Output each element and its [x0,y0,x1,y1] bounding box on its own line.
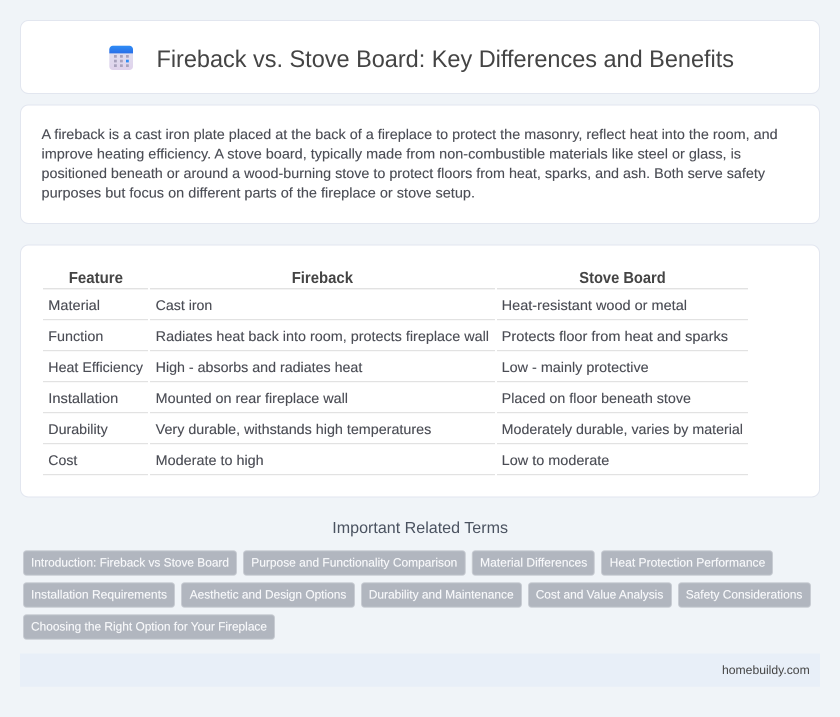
table row: cost [43,452,748,475]
table row: heat efficiency: High - absorbs and radiates heat [156,359,362,375]
tag: safety: Safety Considerations [686,588,802,602]
table row: material: Material [48,297,100,313]
icon: calendar [109,46,133,70]
tag: aesthetic [182,583,354,607]
tag: material [472,551,594,575]
table row: durability: Very durable, withstands high temperatures [156,421,431,437]
table row: installation: Mounted on rear fireplace wall [156,390,348,406]
tag: material: Material Differences [480,556,587,570]
tag: purpose [244,551,465,575]
table row: cost: Moderate to high [156,452,264,468]
text block: definition paragraph: A fireback is a cast iron plate placed at the back of a fireplace to protect the masonry, reflect heat into the room, and [42,126,778,142]
table row: heat efficiency [43,359,748,382]
text block: definition paragraph: purposes but focus on different parts of the fireplace or stove setup. [42,184,475,200]
tag: installation: Installation Requirements [31,588,167,602]
table row: function: Radiates heat back into room, protects fireplace wall [156,328,489,344]
table row: cost: Low to moderate [502,452,610,468]
table header row: Stove Board [579,270,666,287]
tag: safety [678,583,810,607]
table header row: Feature [69,270,123,287]
heading: related terms: Important Related Terms [332,520,508,537]
tag: durability: Durability and Maintenance [369,588,514,602]
tag: choosing [24,615,274,639]
table header row [43,270,748,289]
panel: header [20,20,820,94]
table row: function: Protects floor from heat and sparks [502,328,728,344]
table row: durability: Moderately durable, varies by material [502,421,743,437]
table row: installation [43,390,748,413]
table header row: Fireback [292,270,353,287]
footer [20,654,820,687]
panel: introduction [20,105,820,224]
footer source text: homebuildy.com [722,663,810,677]
tag: introduction [24,551,236,575]
tag: cost: Cost and Value Analysis [536,588,663,602]
tag: aesthetic: Aesthetic and Design Options [190,588,346,602]
text block: definition paragraph: positioned beneath or around a wood-burning stove to protect floors from heat, sparks, and ash. Both serve safety [42,165,765,181]
table row: material: Heat-resistant wood or metal [502,297,687,313]
tag: choosing: Choosing the Right Option for Your Fireplace [31,620,267,634]
text block: definition paragraph: improve heating efficiency. A stove board, typically made from non-combustible materials like steel or glass, is [42,146,741,162]
tag: durability [362,583,522,607]
table row: function [43,328,748,351]
table row: installation: Installation [48,390,118,406]
tag: heat protection: Heat Protection Performance [610,556,766,570]
tag: installation [24,583,174,607]
panel: comparison table [20,245,820,497]
table row: durability: Durability [48,421,108,437]
table row: function: Function [48,328,103,344]
tag: purpose: Purpose and Functionality Comparison [251,556,457,570]
title: Fireback vs. Stove Board: Key Differences and Benefits [156,46,734,73]
table row: material: Cast iron [156,297,212,313]
table row: cost: Cost [48,452,77,468]
table row: installation: Placed on floor beneath stove [502,390,691,406]
tag: cost [528,583,672,607]
table row: heat efficiency: Heat Efficiency [48,359,143,375]
tag: introduction: Introduction: Fireback vs Stove Board [31,556,229,570]
tag: heat protection [602,551,772,575]
panel: related term tags [24,551,810,639]
text block: definition paragraph [42,126,778,200]
table row: durability [43,421,748,444]
table row: material [43,297,748,320]
table row: heat efficiency: Low - mainly protective [502,359,649,375]
